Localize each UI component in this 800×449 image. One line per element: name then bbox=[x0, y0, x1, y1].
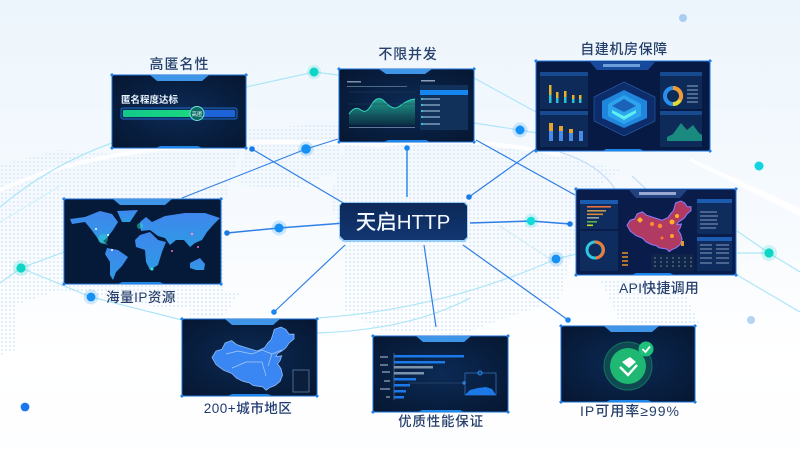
inset chart bbox=[408, 371, 496, 395]
light streak bbox=[690, 158, 800, 216]
label: IP availability: IP可用率≥99% bbox=[580, 403, 680, 419]
area chart bbox=[347, 81, 416, 128]
panel heading: 匿名程度达标 bbox=[121, 94, 179, 106]
hexagon emblem bbox=[594, 82, 655, 136]
China map bbox=[212, 327, 309, 392]
glow points bbox=[95, 223, 199, 270]
area chart bbox=[660, 111, 702, 147]
central node: TianQi HTTP bbox=[339, 202, 468, 242]
panel: world map bbox=[62, 197, 223, 286]
left bar chart top bbox=[540, 72, 588, 109]
side list bbox=[420, 80, 468, 130]
panel: quality performance bbox=[371, 334, 510, 414]
label: high anonymity: 高匿名性 bbox=[150, 56, 210, 72]
label: 200+ cities: 200+城市地区 bbox=[204, 400, 292, 416]
label: massive IP resources: 海量IP资源 bbox=[106, 290, 176, 305]
icon: green check shield bbox=[604, 342, 654, 390]
label: unlimited concurrency: 不限并发 bbox=[378, 46, 438, 62]
panel: self-built data center bbox=[534, 59, 712, 153]
heat map of China bbox=[627, 201, 691, 252]
blue connector lines bbox=[182, 139, 575, 327]
panel: high anonymity bbox=[110, 73, 248, 150]
legend and table bbox=[622, 253, 694, 271]
central title: 天启HTTP bbox=[356, 211, 450, 234]
label: self-built data center: 自建机房保障 bbox=[580, 41, 668, 57]
horizontal bars bbox=[380, 353, 464, 400]
panel: API quick call bbox=[574, 187, 738, 277]
world map continents bbox=[70, 210, 220, 280]
light connector lines bbox=[0, 72, 800, 333]
left bar chart bottom bbox=[540, 111, 588, 147]
dotted world map backdrop bbox=[0, 122, 700, 355]
anonymity progress bar: 高匿 bbox=[191, 110, 203, 118]
label: API quick call: API快捷调用 bbox=[619, 280, 699, 296]
ring chart bbox=[580, 231, 618, 271]
right text panels bbox=[697, 199, 732, 271]
panel: unlimited concurrency bbox=[337, 67, 476, 144]
left ranking bars bbox=[580, 200, 618, 229]
label: quality performance: 优质性能保证 bbox=[398, 414, 484, 429]
donut chart bbox=[660, 72, 702, 109]
panel: IP availability bbox=[559, 324, 697, 404]
panel: 200+ cities bbox=[180, 317, 319, 398]
